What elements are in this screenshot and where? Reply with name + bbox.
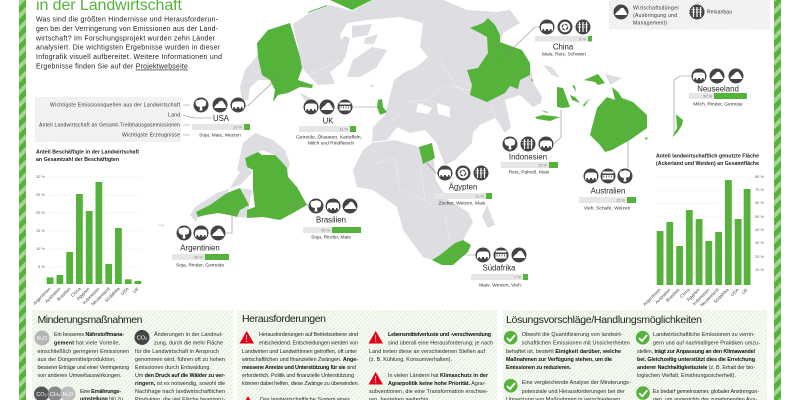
stripe: right border [774,0,781,400]
legend: top right: Reisanbau [707,10,732,16]
country: USA: 10 % [233,124,243,130]
panel: Minderungsmaßnahmen: Nachfrage nach landwirtschaftlichen [135,389,225,395]
bar chart: agricultural land share: 30 % [755,240,764,245]
country: Ägypten: Zucker, Weizen, Mais [439,201,486,207]
country: Südafrika [450,248,528,289]
bar chart: agricultural land share: UK [741,287,749,295]
country: Ägypten [427,163,492,207]
country: USA: Soja, Mais, Weizen [199,132,241,138]
country: Indonesien: Reis, Palmöl, Mais [509,170,550,176]
legend: how to read [35,97,212,142]
panel: Lösungsvorschläge: behaftet ist, besteht Einigkeit darüber, welche [506,349,621,355]
bar chart: employment share: 5 % [38,264,45,269]
bar chart: agricultural land share: Argentinien [642,287,662,307]
panel: Minderungsmaßnahmen: einschließlich geringerer Emissionen [38,349,129,355]
bar chart: agricultural land share: Brasilien [665,287,681,303]
panel: Lösungsvorschläge: bei. Gleichzeitig unterstützt dies die Erreichung [637,357,755,363]
bar chart: agricultural land share: USA [730,287,740,297]
panel: Minderungsmaßnahmen: CH₄ [50,392,61,398]
country: UK: UK [323,116,334,126]
bar chart: agricultural land share: 80 % [755,174,764,179]
panel: Minderungsmaßnahmen: Ein besseres Nährstoffmana- [54,332,124,338]
bar chart: employment share: Anteil Beschäftigte in der Landwirtschaft [36,150,139,156]
panel: Minderungsmaßnahmen: CO₂ [137,336,147,342]
panel: Lösungsvorschläge: Maßnahmen zur Verfügung stehen, um die [506,357,612,363]
country: Brasilien [287,198,361,241]
intro text: wirtschaft? Im Forschungsprojekt wurden zehn Länder [35,35,216,42]
panel: Minderungsmaßnahmen: Um den Druck auf die Wälder zu ver- [135,373,225,379]
country: Argentinien: 42 % [194,254,204,260]
legend: top right: Management) [633,20,667,26]
legend: how to read: Wichtigste Erzeugnisse [122,132,180,138]
panel: Herausforderungen: subventionen, die eine Transformation erschwe- [369,389,488,395]
stripe: left border [19,0,26,400]
panel: Herausforderungen: wirtschaftlichen und finanziellen Zwängen. Ange- [241,357,358,363]
panel: Herausforderungen: Lebensmittelverluste und -verschwendung [388,332,491,338]
country: Indonesien [501,110,561,176]
panel: Herausforderungen: erforderlich. Politik und finanzielle Unterstützung [242,373,354,379]
bar chart: employment share: Argentinien [32,286,52,306]
panel: Lösungsvorschläge: Eine vergleichende Analyse der Minderungs- [522,380,631,386]
intro text [35,16,222,71]
country: Südafrika: 7 % [514,274,522,280]
country: China: China [553,42,574,52]
bar chart: agricultural land share: Ägypten [685,286,701,302]
country: UK: 11 % [339,126,349,132]
panel: Lösungsvorschläge [503,310,767,400]
intro text: Was sind die größten Hindernisse und Herausforderun- [36,16,218,24]
panel: Lösungsvorschläge: logischen Vielfalt, Ernährungssicherheit). [637,373,736,379]
panel: Herausforderungen: können dabei helfen, diese Zwänge zu überwinden. [242,381,359,387]
panel: Lösungsvorschläge: schaftlichen Emissionen mit Unsicherheiten [522,340,630,346]
panel: Herausforderungen: Herausforderungen [242,313,326,325]
country: Brasilien: Brasilien [316,216,346,224]
panel: Herausforderungen: Herausforderungen auf Betriebsebene sind [259,332,358,338]
panel: Lösungsvorschläge: anderer Nachhaltigkeitsziele (z. B. Erhalt der bio- [637,365,755,371]
country: Argentinien: Soja, Rinder, Getreide [176,263,224,269]
panel: Minderungsmaßnahmen: ringern, ist es notwendig, sowohl die [135,381,225,387]
country: Ägypten: Ägypten [449,182,477,192]
panel: Minderungsmaßnahmen: Minderungsmaßnahmen [38,314,143,326]
panel: Minderungsmaßnahmen: N₂O [63,392,74,398]
country: Neuseeland: 50 % [703,94,713,98]
bar chart: employment share: 15 % [36,228,45,233]
country: Australien: 15 % [616,198,626,202]
bar chart: agricultural land share: 70 % [755,187,764,192]
bar chart: employment share: 20 % [36,210,45,215]
country: Argentinien: Argentinien [180,244,220,252]
bar chart: agricultural land share: 50 % [755,214,764,219]
panel: Lösungsvorschläge: potenziale und Herausforderungen bei der [522,389,625,395]
bar chart: employment share: Brasilien [56,286,72,302]
panel: Herausforderungen: (z. B. Kühlung, Konsumverhalten). [369,357,452,363]
bar chart: employment share: 10 % [36,246,45,251]
panel: Herausforderungen: Land treten diese an verschiedenen Stellen auf [369,349,486,355]
panel: Herausforderungen: Agrarpolitik keine hohe Priorität. Agrar- [388,381,486,387]
intro text: Infografik visuell aufbereitet. Weitere Informationen und [36,54,222,61]
panel: Herausforderungen: entscheidend. Entscheidungen werden von [259,340,358,346]
country: Brasilien: Soja, Rinder, Mais [311,235,351,241]
panel: Lösungsvorschläge: Es bedarf gemeinsamer, globaler Anstrengun- [653,389,759,395]
legend: how to read: Anteil Landwirtschaft an Gesamt-Treibhausgasemissionen [39,122,180,128]
bar chart: agricultural land share: Anteil landwirtschaftlich genutzte Fläche [656,154,759,160]
country: Indonesien: Indonesien [509,152,547,162]
bar chart: agricultural land share: 20 % [755,254,764,259]
country: Südafrika: Südafrika [483,264,516,272]
bar chart: employment share: Südafrika [104,286,121,303]
bar chart: agricultural land share [642,154,764,308]
country: China: 6 % [579,36,587,41]
bar chart: agricultural land share: 10 % [755,267,764,272]
bar chart: agricultural land share: China [679,287,691,299]
panel: Lösungsvorschläge: Obwohl die Quantifizierung von landwirt- [522,332,623,338]
country: UK [296,100,378,146]
legend: top right: Wirtschaftsdünger [633,6,679,12]
bar chart: agricultural land share: 60 % [755,200,764,205]
country: Neuseeland: Neuseeland [697,84,739,94]
panel: Herausforderungen: In vielen Ländern hat Klimaschutz in der [388,373,489,379]
world map [157,0,683,265]
country: Australien: Vieh, Schafe, Weizen [584,206,631,212]
country: Neuseeland: Milch, Rinder, Gemüse [693,102,743,108]
bar chart: employment share: Neuseeland [90,286,111,307]
bar chart: employment share: China [70,286,82,298]
panel: Herausforderungen: sind überall eine Herausforderung; je nach [388,340,493,346]
bar chart: agricultural land share: Indonesien [692,287,711,306]
country: Argentinien [172,207,232,269]
country: Ägypten: 11 % [475,194,485,198]
bar chart: employment share: Ägypten [75,285,91,301]
panel: Lösungsvorschläge: Emissionen zu reduzieren. [506,365,572,371]
panel: Minderungsmaßnahmen: Eine Ernährungs- [80,389,121,395]
legend: how to read: Land [168,112,180,118]
country: Indonesien: 15 % [538,162,548,168]
panel: Minderungsmaßnahmen: Änderungen in der Landnut- [154,331,223,338]
panel: Minderungsmaßnahmen: aus der Düngemittelproduktion, [38,357,116,363]
bar chart: employment share: 30 % [36,174,45,179]
country: Australien [579,120,636,212]
panel: Herausforderungen: messene Anreize und Unterstützung für sie sind [242,365,356,371]
panel: Minderungsmaßnahmen: von anderen Umweltauswirkungen. [38,373,122,379]
bar chart: agricultural land share: Australien [654,287,672,305]
panel: Minderungsmaßnahmen: N₂O [37,336,48,342]
bar chart: agricultural land share: Südafrika [713,287,730,304]
country: Neuseeland [674,68,747,133]
panel: Minderungsmaßnahmen: Emissionen durch Entwaldung. [135,365,211,371]
bar chart: agricultural land share: (Ackerland und Weiden) an Gesamtfläche [656,161,759,167]
panel: Lösungsvorschläge: gern und auf nachhaltigere Praktiken umzu- [653,340,760,346]
bar chart: employment share: Indonesien [82,286,101,305]
bar chart: employment share: 25 % [36,192,45,197]
panel: Lösungsvorschläge: Lösungsvorschläge/Handlungsmöglichkeiten [506,314,702,326]
panel: Herausforderungen: Landwirten und Landwirtinnen getroffen, oft unter [242,349,357,355]
bar chart: employment share: Australien [44,286,62,304]
legend: top right [609,0,770,30]
country: Südafrika: Mais, Weizen, Vieh [479,283,521,289]
bar chart: employment share: an Gesamtzahl der Beschäftigten [36,157,119,163]
legend: top right: (Ausbringung und [633,13,677,19]
panel: Minderungsmaßnahmen [32,310,233,400]
panel: Herausforderungen [237,310,497,400]
country: UK: Milch und Rindfleisch [308,140,354,146]
panel: Minderungsmaßnahmen: CO₂ [36,392,47,398]
bar chart: employment share [32,150,141,307]
bar chart: agricultural land share: Neuseeland [699,287,720,308]
bar chart: agricultural land share: 40 % [755,227,764,232]
intro text: analysiert. Die wichtigsten Ergebnisse wurden in dieser [36,45,221,52]
legend: how to read: Wichtigste Emissionsquellen aus der Landwirtschaft [50,102,181,108]
panel: Minderungsmaßnahmen: besserer Erträge und einer Verringerung [38,365,129,371]
intro text: Ergebnisse finden Sie auf der Projektwebseite. [36,64,190,71]
country: Australien: Australien [591,186,625,196]
panel: Minderungsmaßnahmen: für die Landwirtschaft in Anspruch [135,349,219,355]
country: UK: Getreide, Ölsaaten, Kartoffeln, [296,134,362,141]
country: China: Mais, Reis, Schwein [542,52,586,58]
country: Brasilien: 49 % [321,228,331,232]
country: USA: USA [213,114,230,123]
bar chart: employment share: USA [120,286,130,296]
country: China [504,20,592,58]
intro text: gen bei der Verringerung von Emissionen aus der Land- [36,26,218,33]
panel: Minderungsmaßnahmen: gement hat viele Vorteile, [54,340,120,346]
bar chart: employment share: UK [132,286,140,294]
panel: Lösungsvorschläge: stellen, trägt zur Anpassung an den Klimawandel [637,349,756,355]
panel: Minderungsmaßnahmen: zung, durch die mehr Fläche [154,340,223,346]
panel: Lösungsvorschläge: Landwirtschaftliche Emissionen zu verrin- [653,332,755,338]
country: USA [192,78,277,138]
panel: Minderungsmaßnahmen: genommen wird, führen oft zu hohen [135,357,225,363]
